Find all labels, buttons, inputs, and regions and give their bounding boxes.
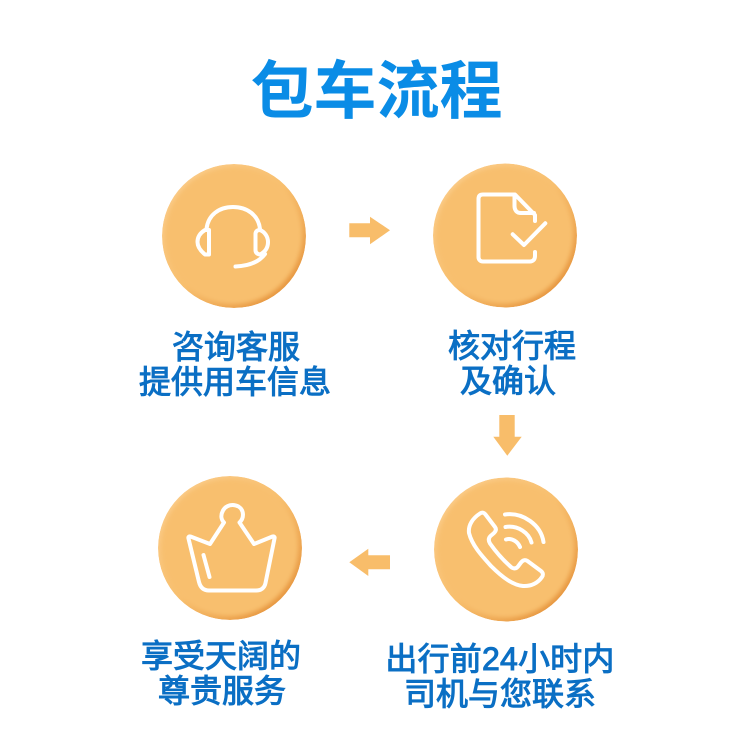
icon: phone with signal waves [469, 513, 544, 586]
label: step 2: 及确认 [460, 363, 556, 399]
label: step 2 [448, 328, 576, 399]
icon: crown [188, 505, 275, 590]
circle badge: step 4 [158, 476, 302, 620]
label: step 1: 提供用车信息 [139, 364, 331, 400]
label: step 1 [139, 329, 331, 400]
label: step 4: 尊贵服务 [158, 673, 286, 709]
step 4: premium service [141, 476, 302, 709]
label: step 4 [141, 638, 301, 709]
arrow: down [493, 415, 522, 456]
label: step 1: 咨询客服 [172, 329, 300, 365]
circle badge: step 1 [162, 164, 306, 308]
label: step 4: 享受天阔的 [141, 638, 301, 674]
infographic canvas [139, 58, 612, 709]
icon: document with check [478, 194, 545, 262]
circle badge: step 2 [433, 164, 577, 308]
step 2: verify itinerary [433, 164, 577, 399]
arrow: right [349, 217, 390, 244]
label: step 3 [385, 641, 615, 712]
step 1: consult customer service [139, 164, 331, 400]
circle badge: step 3 [434, 478, 578, 622]
label: step 2: 核对行程 [448, 328, 576, 364]
icon: headset [198, 207, 268, 266]
label: step 3: 司机与您联系 [404, 676, 596, 712]
label: step 3: 出行前24小时内 [385, 641, 615, 677]
title: 包车流程 [250, 57, 502, 127]
step 3: driver contact by phone [385, 478, 615, 712]
arrow: left [349, 549, 390, 576]
